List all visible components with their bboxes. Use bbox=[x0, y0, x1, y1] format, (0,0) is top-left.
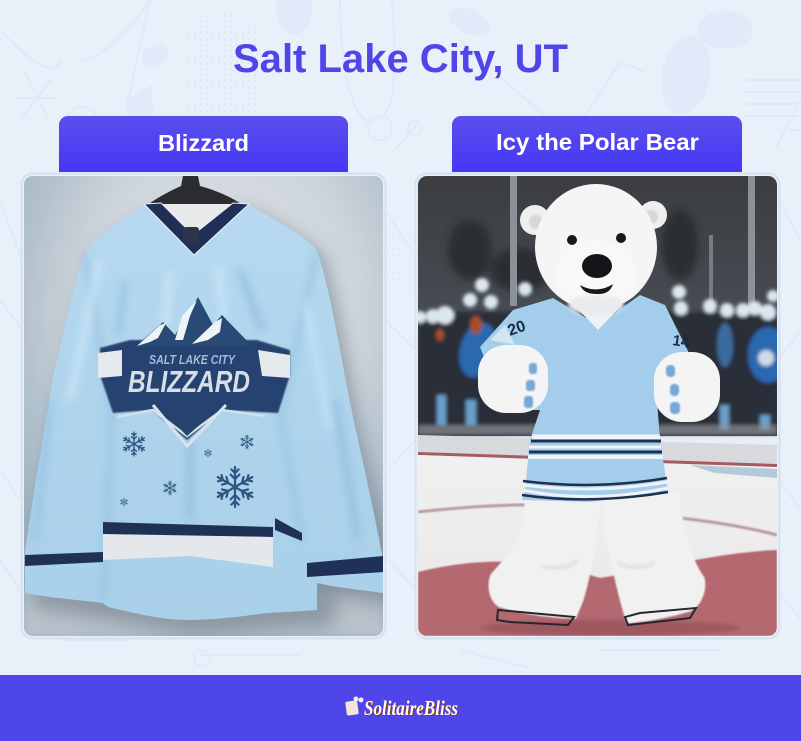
icon: playing cards bbox=[345, 696, 364, 716]
jersey stripes bbox=[522, 437, 668, 499]
sleeve numbers: 20 bbox=[506, 318, 528, 340]
jersey bbox=[480, 295, 690, 502]
Solitaire Bliss logo: SolitaireBliss bbox=[364, 696, 458, 720]
chest crest: BLIZZARD bbox=[128, 364, 250, 399]
Solitaire Bliss logo bbox=[345, 696, 459, 721]
crest text: SALT LAKE CITY bbox=[149, 352, 236, 367]
paws bbox=[478, 345, 720, 422]
photo frame bbox=[22, 174, 386, 638]
heading tab: Icy the Polar Bear: Icy the Polar Bear bbox=[496, 129, 699, 155]
snowflakes bbox=[120, 432, 255, 507]
chest crest bbox=[98, 297, 290, 446]
jersey photo bbox=[24, 176, 397, 637]
mountains bbox=[142, 297, 247, 341]
skates bbox=[497, 608, 696, 625]
ice rink bbox=[418, 455, 777, 636]
polar bear mascot: 14 bbox=[671, 332, 691, 351]
crowd of players bbox=[414, 278, 788, 435]
Solitaire Bliss logo: SolitaireBliss bbox=[365, 697, 459, 721]
panel: Blizzard jersey bbox=[22, 116, 397, 638]
arena background bbox=[418, 176, 777, 436]
footer band bbox=[0, 675, 801, 741]
polar bear mascot bbox=[478, 184, 720, 625]
collar bbox=[144, 203, 249, 255]
hanger bbox=[150, 176, 240, 204]
jersey folds bbox=[35, 252, 358, 600]
head bbox=[520, 184, 667, 315]
rink boards bbox=[418, 435, 777, 468]
heading tab: Icy the Polar Bear bbox=[452, 116, 742, 172]
jersey body bbox=[25, 205, 383, 620]
heading tab: Blizzard: Blizzard bbox=[158, 130, 249, 156]
photo frame bbox=[416, 174, 780, 638]
heading tab: Blizzard bbox=[59, 116, 348, 172]
mascot photo bbox=[414, 176, 788, 636]
legs and feet bbox=[490, 495, 704, 622]
title: Salt Lake City, UT bbox=[233, 37, 568, 81]
panel: Icy the Polar Bear mascot bbox=[414, 116, 788, 638]
hem and cuff stripes bbox=[25, 518, 383, 577]
